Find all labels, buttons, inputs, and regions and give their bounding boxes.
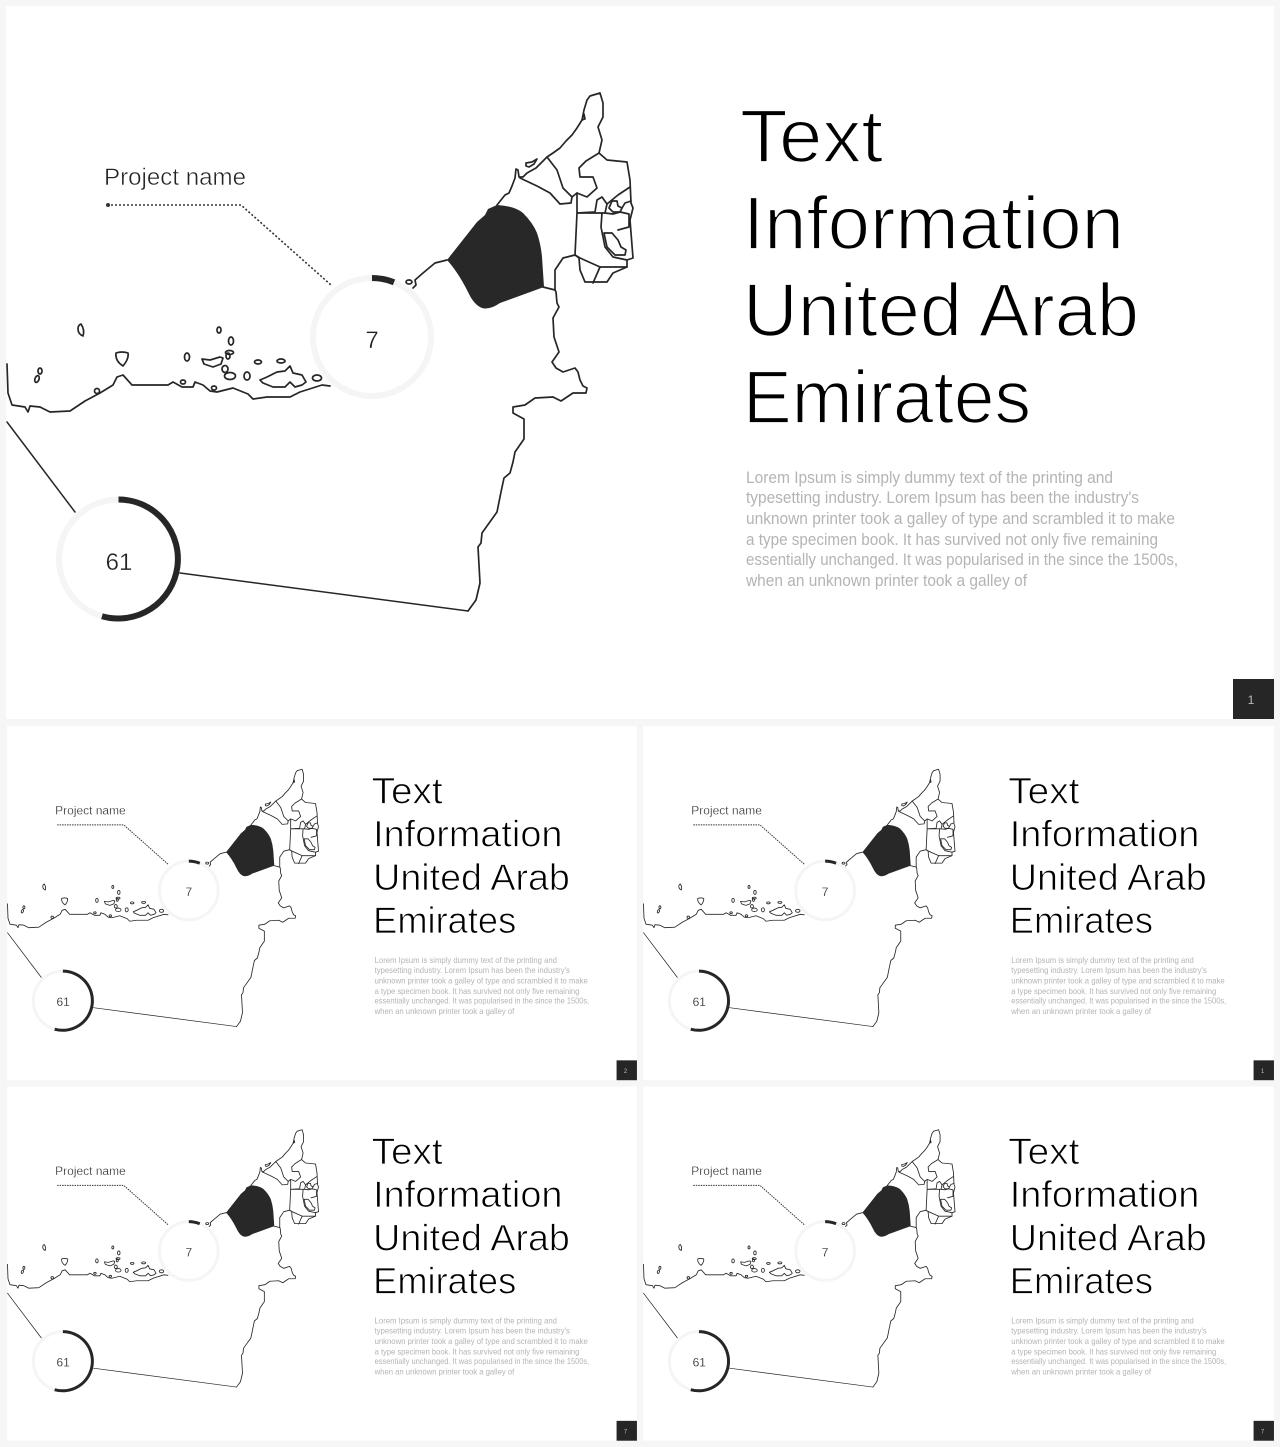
body text: Lorem Ipsum is simply dummy text of the printing and bbox=[375, 1315, 557, 1325]
donut: 7: 7 bbox=[822, 1245, 829, 1259]
panel: slide thumbnail 4 bbox=[7, 1086, 637, 1441]
page number: 7 bbox=[1261, 1429, 1265, 1435]
body text: a type specimen book. It has survived not only five remaining bbox=[375, 986, 580, 996]
donut: 7 bbox=[160, 861, 218, 920]
body text: essentially unchanged. It was popularised in the since the 1500s, bbox=[746, 550, 1178, 569]
page number bbox=[617, 1060, 637, 1080]
donut: 61: 61 bbox=[57, 995, 70, 1009]
body text: typesetting industry. Lorem Ipsum has been the industry's bbox=[1011, 1325, 1207, 1335]
title: United Arab bbox=[1010, 856, 1207, 898]
body text: typesetting industry. Lorem Ipsum has been the industry's bbox=[375, 1325, 570, 1335]
donut: 7 bbox=[796, 861, 854, 920]
body text: unknown printer took a galley of type and scrambled it to make bbox=[375, 975, 588, 985]
map bbox=[7, 1130, 318, 1387]
page number: 2 bbox=[624, 1069, 628, 1075]
donut: 61 bbox=[33, 971, 92, 1030]
title: Text bbox=[372, 1130, 443, 1172]
donut: 7: 7 bbox=[822, 885, 829, 899]
title: Emirates bbox=[373, 899, 516, 941]
body text: essentially unchanged. It was popularised in the since the 1500s, bbox=[375, 996, 589, 1006]
body text: unknown printer took a galley of type and scrambled it to make bbox=[746, 509, 1175, 528]
donut: 7: 7 bbox=[365, 327, 379, 354]
body text bbox=[374, 1315, 589, 1377]
body text: a type specimen book. It has survived not only five remaining bbox=[1011, 1346, 1217, 1356]
body text: typesetting industry. Lorem Ipsum has been the industry's bbox=[1011, 965, 1207, 975]
title: Information bbox=[1010, 1173, 1199, 1215]
map bbox=[7, 769, 318, 1027]
label: Project name with dotted leader bbox=[104, 164, 331, 285]
panel: slide thumbnail 5 bbox=[643, 1086, 1274, 1441]
body text: essentially unchanged. It was popularised in the since the 1500s, bbox=[375, 1356, 589, 1366]
body text: Lorem Ipsum is simply dummy text of the printing and bbox=[1011, 955, 1194, 965]
donut: 61: 61 bbox=[57, 1356, 70, 1370]
title: United Arab bbox=[373, 856, 570, 898]
body text: a type specimen book. It has survived not only five remaining bbox=[375, 1346, 580, 1356]
donut: 61: 61 bbox=[106, 549, 132, 576]
label: Project name: Project name bbox=[691, 1164, 762, 1178]
map: United Arab Emirates with highlighted emirate bbox=[7, 93, 633, 611]
donut: 7: 7 bbox=[186, 1245, 193, 1259]
donut: 7: 7 bbox=[186, 885, 193, 899]
label: Project name bbox=[691, 1164, 805, 1225]
title bbox=[740, 94, 1139, 439]
donut: 7 bbox=[796, 1222, 854, 1280]
title: Emirates bbox=[1010, 1260, 1153, 1302]
body text bbox=[374, 955, 589, 1016]
title: Information bbox=[373, 1173, 562, 1215]
body text: Lorem Ipsum is simply dummy text of the printing and bbox=[375, 955, 557, 965]
donut: 61 bbox=[59, 500, 178, 618]
body text: typesetting industry. Lorem Ipsum has been the industry's bbox=[375, 965, 570, 975]
donut: 61: 61 bbox=[693, 1356, 706, 1370]
title: Information bbox=[743, 181, 1124, 265]
donut: 61 bbox=[669, 971, 729, 1030]
page number bbox=[617, 1421, 637, 1441]
body text bbox=[1010, 1315, 1226, 1377]
title: Text bbox=[1008, 770, 1080, 811]
body text: when an unknown printer took a galley of bbox=[1010, 1006, 1152, 1016]
body text: Lorem Ipsum is simply dummy text of the printing and bbox=[1011, 1315, 1194, 1325]
title: Information bbox=[373, 813, 562, 855]
page number: 1 bbox=[1248, 693, 1255, 707]
body text: unknown printer took a galley of type and scrambled it to make bbox=[375, 1336, 588, 1346]
body text: when an unknown printer took a galley of bbox=[374, 1367, 515, 1377]
map bbox=[643, 1130, 955, 1387]
body text: unknown printer took a galley of type and scrambled it to make bbox=[1011, 1336, 1225, 1346]
body text: when an unknown printer took a galley of bbox=[745, 571, 1027, 590]
title: Text bbox=[740, 94, 883, 178]
label: Project name bbox=[55, 1164, 168, 1225]
title: Emirates bbox=[1010, 899, 1153, 941]
title: United Arab bbox=[373, 1216, 570, 1258]
title: United Arab bbox=[743, 268, 1139, 352]
body text: essentially unchanged. It was popularised in the since the 1500s, bbox=[1011, 996, 1226, 1006]
title bbox=[1008, 770, 1207, 941]
label: Project name: Project name bbox=[55, 803, 126, 817]
body text: a type specimen book. It has survived not only five remaining bbox=[746, 530, 1158, 549]
page number bbox=[1254, 1421, 1274, 1441]
page number: 1 bbox=[1261, 1069, 1265, 1075]
title: United Arab bbox=[1010, 1216, 1207, 1258]
label: Project name with dotted leader: Project name bbox=[104, 164, 246, 191]
title bbox=[1008, 1130, 1207, 1302]
body text: Lorem Ipsum is simply dummy text of the printing and bbox=[746, 468, 1113, 487]
donut: 7 bbox=[313, 278, 431, 396]
body text: when an unknown printer took a galley of bbox=[1010, 1367, 1152, 1377]
panel: main slide bbox=[6, 6, 1274, 719]
page number bbox=[1254, 1060, 1274, 1080]
body text bbox=[745, 468, 1178, 590]
body text: when an unknown printer took a galley of bbox=[374, 1006, 515, 1016]
title bbox=[372, 1130, 570, 1302]
body text: a type specimen book. It has survived not only five remaining bbox=[1011, 986, 1217, 996]
page number: 7 bbox=[624, 1429, 628, 1435]
page number bbox=[1233, 679, 1274, 719]
body text: essentially unchanged. It was popularised in the since the 1500s, bbox=[1011, 1356, 1226, 1366]
label: Project name bbox=[691, 803, 805, 865]
donut: 61 bbox=[669, 1332, 729, 1391]
body text: typesetting industry. Lorem Ipsum has been the industry's bbox=[746, 488, 1139, 507]
label: Project name: Project name bbox=[691, 803, 762, 817]
label: Project name: Project name bbox=[55, 1164, 126, 1178]
panel: slide thumbnail 3 bbox=[643, 726, 1274, 1080]
body text bbox=[1010, 955, 1226, 1016]
body text: unknown printer took a galley of type and scrambled it to make bbox=[1011, 975, 1225, 985]
map bbox=[643, 769, 955, 1027]
panel: slide thumbnail 2 bbox=[7, 726, 637, 1080]
title: Information bbox=[1010, 813, 1199, 855]
label: Project name bbox=[55, 803, 168, 865]
donut: 7 bbox=[160, 1222, 218, 1280]
title bbox=[372, 770, 570, 941]
title: Text bbox=[1008, 1130, 1080, 1172]
donut: 61 bbox=[33, 1332, 92, 1391]
title: Emirates bbox=[743, 355, 1031, 439]
title: Text bbox=[372, 770, 443, 812]
title: Emirates bbox=[373, 1260, 516, 1302]
donut: 61: 61 bbox=[693, 995, 706, 1009]
